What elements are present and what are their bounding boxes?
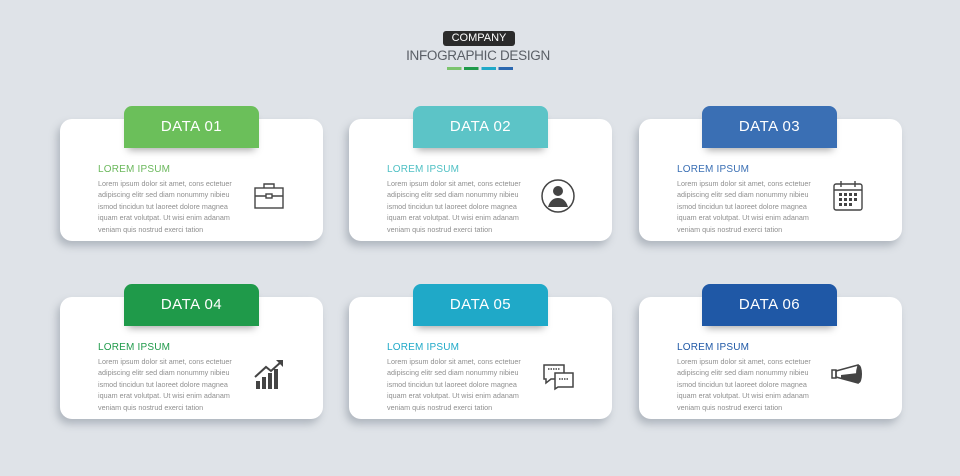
text block: [98, 357, 232, 412]
text block: iquam erat volutpat. Ut wisi enim adanam: [387, 213, 519, 222]
text block: Lorem ipsum dolor sit amet, cons ectetuer: [387, 357, 521, 366]
tab: DATA 04: [124, 284, 259, 326]
tab: DATA 06: DATA 06: [739, 296, 800, 313]
panel: data 02: [349, 119, 612, 241]
tab: DATA 02: [413, 106, 548, 148]
text block: veniam quis nostrud exerci tation: [387, 403, 492, 412]
icon: chat bubbles: [543, 364, 574, 390]
text block: ismod tincidun tut laoreet dolore magnea: [677, 380, 807, 389]
panel: data 03: [639, 119, 902, 241]
text block: veniam quis nostrud exerci tation: [98, 403, 203, 412]
icon: calendar: [833, 181, 863, 211]
text block: iquam erat volutpat. Ut wisi enim adanam: [677, 213, 809, 222]
panel: data 04: [60, 297, 323, 419]
icon: megaphone: [831, 364, 862, 384]
tab: DATA 05: DATA 05: [450, 296, 511, 313]
text block: adipiscing elitr sed diam nonummy nibieu: [677, 190, 808, 199]
text block: [387, 357, 521, 412]
text block: [387, 179, 521, 234]
text block: veniam quis nostrud exerci tation: [387, 225, 492, 234]
heading: LOREM IPSUM: [677, 164, 749, 175]
tab: DATA 04: DATA 04: [161, 296, 222, 313]
text block: veniam quis nostrud exerci tation: [677, 403, 782, 412]
text block: iquam erat volutpat. Ut wisi enim adanam: [677, 391, 809, 400]
text block: adipiscing elitr sed diam nonummy nibieu: [387, 368, 518, 377]
heading: LOREM IPSUM: [677, 342, 749, 353]
text block: Lorem ipsum dolor sit amet, cons ectetuer: [98, 357, 232, 366]
text block: ismod tincidun tut laoreet dolore magnea: [387, 202, 517, 211]
panel: data 01: [60, 119, 323, 241]
heading: LOREM IPSUM: [387, 342, 459, 353]
text block: adipiscing elitr sed diam nonummy nibieu: [387, 190, 518, 199]
icon: person: [541, 179, 575, 213]
heading: LOREM IPSUM: [98, 164, 170, 175]
tab: DATA 02: DATA 02: [450, 118, 511, 135]
text block: [98, 179, 232, 234]
main title: INFOGRAPHIC DESIGN: [406, 48, 550, 63]
icon: briefcase: [254, 183, 284, 209]
text block: iquam erat volutpat. Ut wisi enim adanam: [387, 391, 519, 400]
tab: DATA 03: DATA 03: [739, 118, 800, 135]
text block: Lorem ipsum dolor sit amet, cons ectetuer: [387, 179, 521, 188]
text block: ismod tincidun tut laoreet dolore magnea: [98, 202, 228, 211]
text block: adipiscing elitr sed diam nonummy nibieu: [98, 368, 229, 377]
heading: LOREM IPSUM: [98, 342, 170, 353]
title block: [406, 31, 550, 70]
tab: DATA 01: [124, 106, 259, 148]
text block: ismod tincidun tut laoreet dolore magnea: [98, 380, 228, 389]
text block: iquam erat volutpat. Ut wisi enim adanam: [98, 391, 230, 400]
text block: [677, 357, 811, 412]
panel: data 05: [349, 297, 612, 419]
company label: COMPANY: [452, 32, 506, 44]
text block: veniam quis nostrud exerci tation: [98, 225, 203, 234]
color bars: [447, 67, 513, 70]
text block: Lorem ipsum dolor sit amet, cons ectetuer: [677, 357, 811, 366]
text block: [677, 179, 811, 234]
text block: adipiscing elitr sed diam nonummy nibieu: [98, 190, 229, 199]
text block: Lorem ipsum dolor sit amet, cons ectetuer: [98, 179, 232, 188]
text block: Lorem ipsum dolor sit amet, cons ectetuer: [677, 179, 811, 188]
tab: DATA 05: [413, 284, 548, 326]
company label: [443, 31, 515, 46]
panel: data 06: [639, 297, 902, 419]
heading: LOREM IPSUM: [387, 164, 459, 175]
icon: growth chart: [254, 360, 283, 389]
text block: ismod tincidun tut laoreet dolore magnea: [387, 380, 517, 389]
text block: iquam erat volutpat. Ut wisi enim adanam: [98, 213, 230, 222]
text block: veniam quis nostrud exerci tation: [677, 225, 782, 234]
text block: ismod tincidun tut laoreet dolore magnea: [677, 202, 807, 211]
tab: DATA 06: [702, 284, 837, 326]
text block: adipiscing elitr sed diam nonummy nibieu: [677, 368, 808, 377]
tab: DATA 03: [702, 106, 837, 148]
tab: DATA 01: DATA 01: [161, 118, 222, 135]
